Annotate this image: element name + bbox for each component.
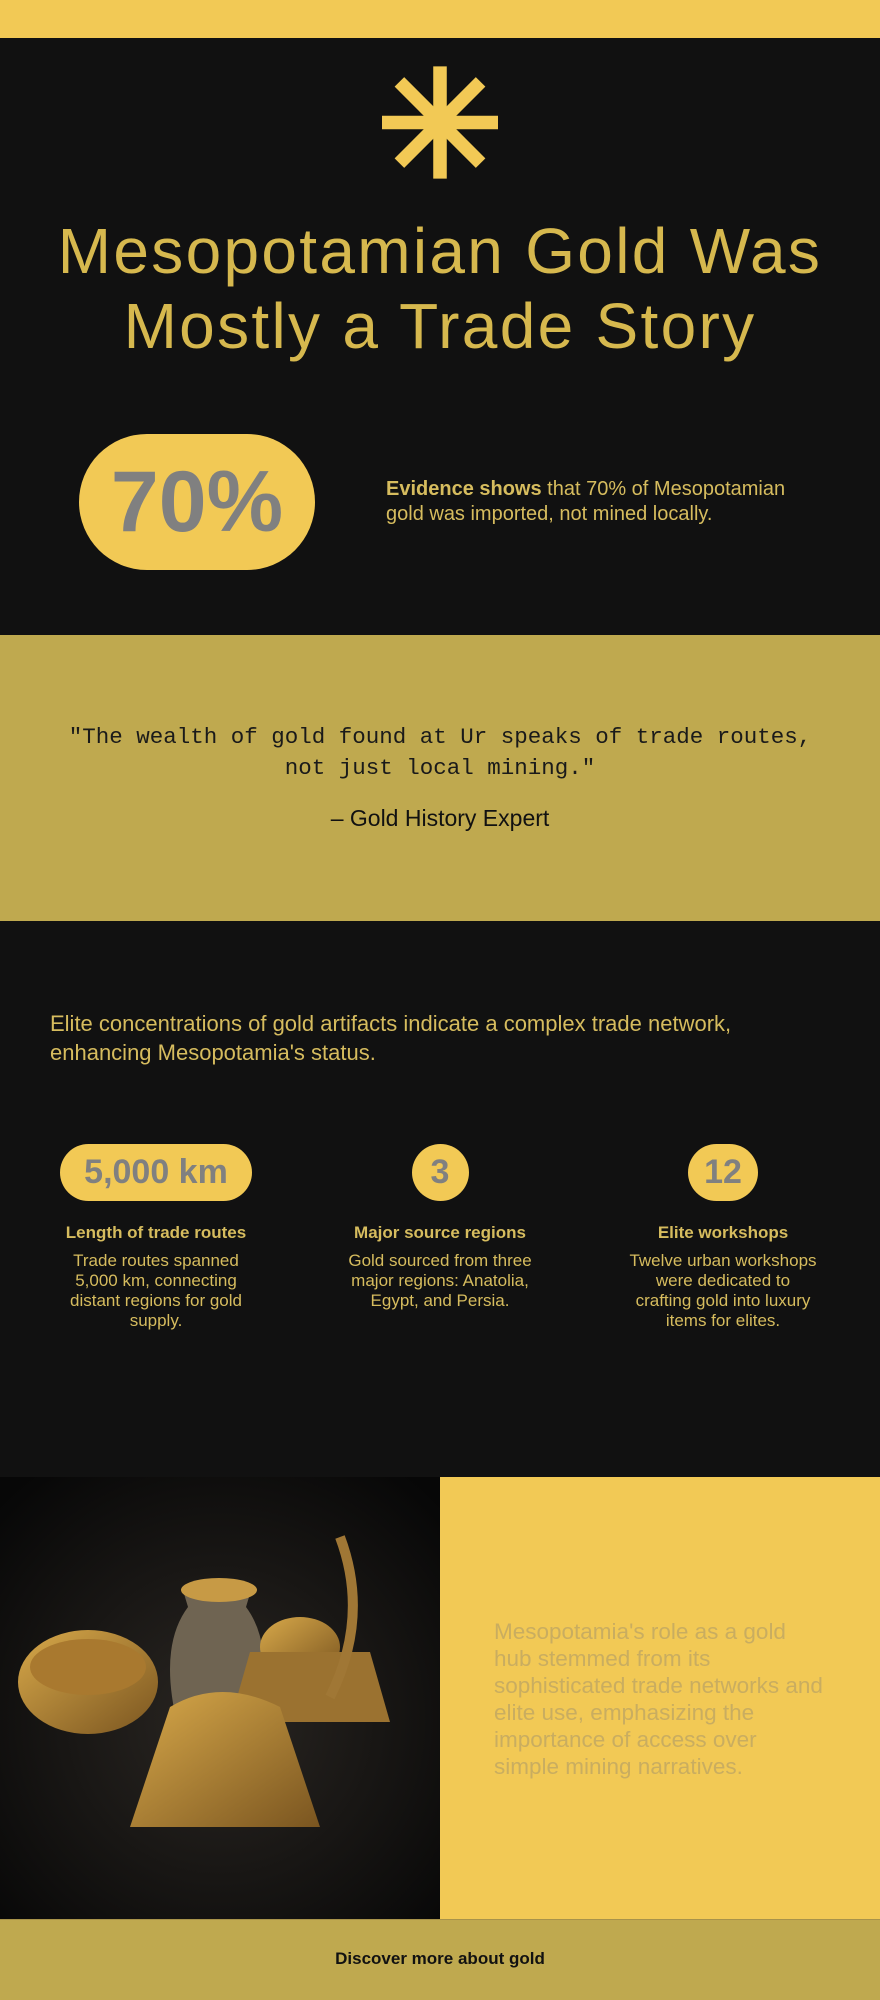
panel: conclusion [440,1477,880,1919]
stat: 12 [629,1144,817,1330]
intro text: Elite concentrations of gold artifacts indicate a complex trade network, enhancing Mesopotamia's status. [50,1011,731,1065]
desc: Gold sourced from three major regions: Anatolia, Egypt, and Persia. [348,1251,532,1310]
stat pill: 70% [79,434,315,570]
quote section [0,635,880,921]
conclusion text: Mesopotamia's role as a gold hub stemmed from its sophisticated trade networks and elite use, emphasizing the importance of access over simple mining narratives. [494,1619,823,1779]
footer [0,1919,880,2000]
image: gold artifacts [0,1477,440,1919]
quote text [69,724,811,781]
stat description: Evidence shows that 70% of Mesopotamian gold was imported, not mined locally. [386,478,785,525]
desc: Twelve urban workshops were dedicated to crafting gold into luxury items for elites. [629,1251,817,1330]
icon: asterisk [382,66,498,179]
network section [0,921,880,1477]
quote author: – Gold History Expert [331,805,549,831]
pill: 5,000 km [84,1153,228,1191]
quote text: not just local mining." [285,755,595,781]
desc: Trade routes spanned 5,000 km, connecting distant regions for gold supply. [70,1251,242,1330]
stat: 3 [348,1144,532,1310]
label: Elite workshops [658,1223,788,1242]
circle [412,1144,468,1201]
top bar [0,0,880,38]
label: Length of trade routes [66,1223,246,1242]
label: Major source regions [354,1223,526,1242]
title [58,215,822,362]
stat: 5,000 km [60,1144,252,1330]
stat pill: 70%: 70% [111,454,283,550]
pill [60,1144,252,1201]
footer link text: Discover more about gold [335,1949,545,1968]
circle [688,1144,758,1201]
title: Mostly a Trade Story [124,290,756,362]
hero section [0,38,880,635]
circle: 3 [431,1153,449,1191]
title: Mesopotamian Gold Was [58,215,822,287]
circle: 12 [704,1153,742,1191]
quote text: "The wealth of gold found at Ur speaks of trade routes, [69,724,811,750]
